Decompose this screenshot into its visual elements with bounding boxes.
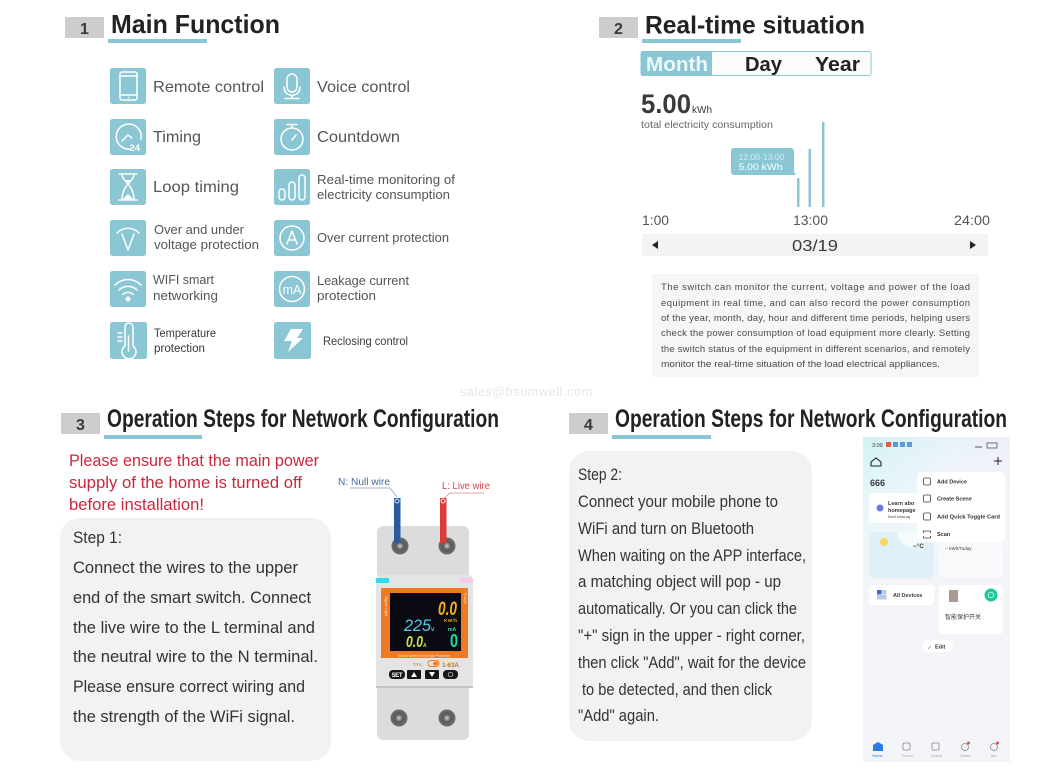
- device: smart switch wiring: KW/h: [444, 618, 457, 623]
- label: over current protection: Over current protection: [317, 230, 449, 245]
- label: leakage protection: protection: [317, 288, 376, 303]
- label: wifi networking: WIFI smart: [153, 272, 214, 287]
- panel: main function list: [110, 68, 455, 359]
- section 2 heading: Real-time situation: [645, 12, 865, 40]
- learn card: Don't show ag: [888, 515, 910, 519]
- tooltip: 5.00 kWh: [738, 162, 782, 173]
- total consumption: kWh: [692, 104, 712, 116]
- panel: step 1: the strength of the WiFi signal.: [73, 708, 295, 726]
- warning text: before installation!: [69, 495, 204, 514]
- bottom navigation: Smart: [960, 753, 972, 758]
- panel: step 2: Step 2:: [578, 466, 622, 484]
- bottom navigation: Me: [991, 753, 997, 758]
- device card: [939, 585, 1003, 634]
- status bar: 3:09: [872, 443, 883, 449]
- menu popup: [917, 472, 1005, 542]
- tooltip: [731, 148, 796, 175]
- device: smart switch wiring: 0: [450, 631, 458, 651]
- panel: step 2: WiFi and turn on Bluetooth: [578, 520, 754, 538]
- text block: description: the switch status of the equipment in different scenarios, and remotely: [661, 344, 970, 355]
- label: real-time monitoring: electricity consumption: [317, 187, 450, 202]
- home icon and plus: [871, 457, 1002, 466]
- device: smart switch wiring: Smart Metered Energy Protector: [398, 654, 451, 658]
- label: remote control: Remote control: [153, 79, 264, 96]
- watermark: sales@bsumwell.com: [460, 385, 592, 399]
- icon: ammeter: [274, 220, 310, 256]
- section 3 heading: Operation Steps for Network Configuration: [107, 405, 499, 433]
- icon: phone: [110, 68, 146, 104]
- label: reclosing control: Reclosing control: [323, 334, 408, 348]
- total consumption: total electricity consumption: [641, 119, 773, 131]
- panel: step 2: Connect your mobile phone to: [578, 493, 778, 511]
- text block: description: of the year, month, day, hour and different time periods, helping users: [661, 313, 970, 324]
- text block: description: check the power consumption of load equipment more clearly. Setting: [661, 328, 970, 339]
- tooltip: 12:00-13:00: [738, 152, 785, 162]
- section 4 heading: 4: [584, 417, 593, 434]
- panel: step 2: When waiting on the APP interface,: [578, 547, 806, 565]
- label: wifi networking: [153, 272, 218, 303]
- panel: step 1: Please ensure correct wiring and: [73, 678, 305, 696]
- panel: step 2: [569, 451, 812, 741]
- icon: lightning: [274, 322, 311, 359]
- label: real-time monitoring: [317, 172, 455, 202]
- icon: bars: [274, 169, 310, 205]
- phone screenshot: [863, 437, 1010, 762]
- section 3 heading: [61, 405, 499, 439]
- device: smart switch wiring: 225: [403, 616, 432, 635]
- label: countdown: Countdown: [317, 129, 400, 146]
- panel: step 1: the neutral wire to the N terminal.: [73, 648, 318, 666]
- learn card: homepage: [888, 508, 916, 514]
- label: temperature protection: [154, 328, 216, 355]
- device: smart switch wiring: Power: [463, 593, 467, 604]
- device: smart switch wiring: mA: [448, 627, 456, 633]
- section 3 heading: 3: [76, 417, 85, 434]
- energy card: -- kWh/Today: [945, 546, 972, 551]
- edit button: [922, 640, 953, 652]
- label: timing: Timing: [153, 129, 201, 146]
- text block: description: [652, 274, 979, 377]
- panel: step 1: end of the smart switch. Connect: [73, 589, 311, 607]
- section 1 heading: Main Function: [111, 9, 280, 39]
- date selector: 03/19: [792, 238, 838, 255]
- axis labels: 1:00: [642, 212, 669, 228]
- learn card: Learn abo: [888, 501, 915, 507]
- menu popup: Scan: [937, 532, 951, 538]
- bottom navigation: [872, 742, 999, 758]
- label: loop timing: Loop timing: [153, 179, 239, 196]
- label: voice control: Voice control: [317, 79, 410, 96]
- learn card: [869, 493, 921, 523]
- panel: step 2: "Add" again.: [578, 707, 659, 725]
- icon: milliamp meter: [274, 271, 310, 307]
- section 4 heading: [569, 405, 1007, 439]
- total consumption: 5.00: [641, 89, 691, 119]
- device card: 智能保护开关: [945, 613, 981, 621]
- section 2 heading: 2: [614, 21, 623, 38]
- tabs: month day year: Day: [745, 54, 783, 76]
- panel: step 2: then click "Add", wait for the device: [578, 654, 806, 672]
- icon: microphone: [274, 68, 310, 104]
- warning text: supply of the home is turned off: [69, 473, 302, 492]
- label: voltage protection: voltage protection: [154, 237, 259, 252]
- label: leakage protection: [317, 273, 409, 303]
- icon: 24 hour clock: 24: [130, 143, 141, 154]
- axis labels: 13:00: [793, 212, 828, 228]
- device: smart switch wiring: A: [423, 643, 427, 649]
- bar chart: [642, 122, 990, 228]
- weather card: --°C: [913, 544, 924, 550]
- energy card: [939, 542, 1003, 578]
- icon: milliamp meter: mA: [283, 283, 302, 297]
- icon: 24 hour clock: [110, 119, 146, 155]
- panel: step 2: "+" sign in the upper - right corner,: [578, 627, 805, 645]
- section 1 heading: 1: [80, 21, 89, 38]
- panel: step 1: Step 1:: [73, 529, 122, 547]
- text block: description: The switch can monitor the current, voltage and power of the load: [661, 282, 970, 293]
- axis labels: 24:00: [954, 212, 990, 228]
- section 1 heading: [65, 9, 280, 43]
- device: smart switch wiring: 1-63A: [442, 662, 459, 669]
- tabs: month day year: Year: [815, 54, 860, 76]
- label: voltage protection: Over and under: [154, 222, 245, 237]
- label: wifi networking: networking: [153, 288, 218, 303]
- panel: step 2: a matching object will pop - up: [578, 573, 781, 591]
- all devices card: All Devices: [893, 593, 922, 599]
- bottom navigation: Room: [902, 753, 913, 758]
- device: smart switch wiring: 0.0: [438, 599, 457, 620]
- device: smart switch wiring: 0.0: [406, 634, 423, 651]
- warning text: [69, 451, 319, 514]
- text block: description: equipment in real time, and can also record the power consumption: [661, 298, 970, 309]
- panel: step 2: automatically. Or you can click the: [578, 600, 797, 618]
- date selector: [642, 234, 988, 256]
- axis labels: [642, 212, 990, 228]
- device: smart switch wiring: TY-L: [413, 662, 423, 667]
- label: real-time monitoring: Real-time monitoring of: [317, 172, 455, 187]
- wire labels: N: Null wire: [338, 477, 390, 488]
- bottom navigation: Scene: [931, 753, 943, 758]
- tabs: month day year: [641, 51, 871, 76]
- total consumption: [641, 89, 773, 131]
- warning text: Please ensure that the main power: [69, 451, 319, 470]
- panel: step 1: [60, 518, 331, 761]
- icon: thermometer: [110, 322, 147, 359]
- menu popup: Add Device: [937, 480, 967, 486]
- menu popup: Create Scene: [937, 496, 972, 502]
- panel: step 2: to be detected, and then click: [582, 681, 773, 699]
- icon: voltage: [110, 220, 146, 256]
- bottom navigation: Home: [872, 753, 883, 758]
- label: voltage protection: [154, 222, 259, 252]
- label: temperature protection: protection: [154, 343, 205, 355]
- icon: hourglass: [110, 169, 146, 205]
- menu popup: Add Quick Toggle Card: [937, 514, 1000, 520]
- panel: step 1: the live wire to the L terminal and: [73, 619, 315, 637]
- device: smart switch wiring: v: [431, 627, 435, 633]
- tabs: month day year: Month: [646, 54, 708, 76]
- device: smart switch wiring: Signal Light: [384, 596, 388, 617]
- panel: step 1: Connect the wires to the upper: [73, 559, 299, 577]
- device: smart switch wiring: SET: [392, 673, 403, 679]
- label: temperature protection: Temperature: [154, 328, 216, 340]
- label: leakage protection: Leakage current: [317, 273, 409, 288]
- device: smart switch wiring: [338, 477, 490, 740]
- status bar: [872, 442, 997, 449]
- icon: wifi: [110, 271, 146, 307]
- wire labels: [338, 477, 490, 499]
- icon: stopwatch: [274, 119, 310, 155]
- wire labels: L: Live wire: [442, 481, 490, 492]
- all devices card: [869, 585, 934, 605]
- edit button: Edit: [935, 644, 946, 650]
- phone screenshot: 666: [870, 478, 885, 488]
- text block: description: monitor the real-time situation of the load electrical appliances.: [661, 359, 940, 370]
- weather card: [869, 532, 934, 578]
